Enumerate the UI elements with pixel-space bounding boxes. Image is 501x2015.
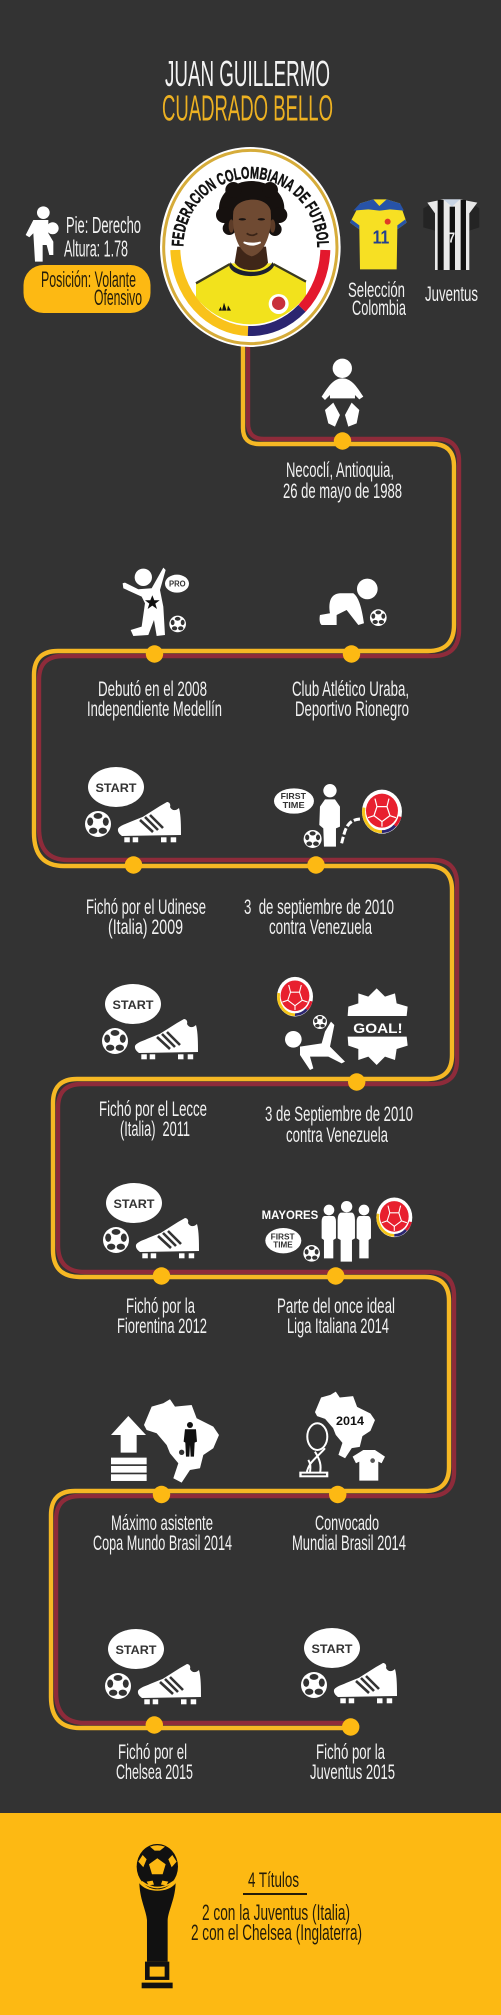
icon: top assist Brazil	[111, 1399, 219, 1483]
icon: crawling baby with ball	[320, 579, 387, 626]
player stats	[64, 212, 141, 262]
caption: first goal: contra Venezuela	[286, 1124, 388, 1147]
timeline dots	[125, 432, 365, 1736]
titles text: 4 Títulos	[248, 1869, 299, 1892]
caption: top assist	[93, 1512, 232, 1555]
caption: ideal team: Liga Italiana 2014	[287, 1315, 389, 1338]
caption: birth	[283, 459, 402, 503]
caption: birth: Necoclí, Antioquia,	[286, 459, 394, 482]
icon: start boot Chelsea	[105, 1629, 201, 1704]
caption: debut: Independiente Medellín	[87, 698, 222, 721]
position pill	[24, 265, 150, 313]
caption: first goal: 3 de Septiembre de 2010	[265, 1103, 413, 1126]
caption: first match	[244, 896, 394, 939]
caption: top assist: Máximo asistente	[111, 1512, 213, 1535]
icon: first time call-up: FIRST	[281, 791, 307, 801]
player stats: Pie: Derecho	[66, 212, 141, 238]
icon: start boot Lecce	[102, 984, 198, 1059]
icon: Juventus jersey	[423, 199, 479, 270]
caption: ideal team	[277, 1295, 395, 1338]
icon: pro player	[123, 568, 189, 636]
title	[162, 53, 333, 128]
player stats: Altura: 1.78	[64, 236, 128, 262]
caption: birth: 26 de mayo de 1988	[283, 480, 402, 503]
icon: start boot Udinese: START	[96, 781, 137, 795]
title: JUAN GUILLERMO	[165, 53, 330, 94]
icon: goal with crest	[277, 977, 408, 1070]
caption: first match: contra Venezuela	[269, 916, 372, 939]
icon: ideal team: FIRST	[271, 1232, 295, 1241]
caption: youth clubs	[292, 678, 409, 721]
caption: top assist: Copa Mundo Brasil 2014	[93, 1532, 232, 1555]
caption: Juventus: Juventus 2015	[310, 1761, 395, 1784]
caption: Chelsea	[116, 1741, 193, 1784]
caption: Lecce: Fichó por el Lecce	[99, 1098, 207, 1121]
caption: Udinese: Fichó por el Udinese	[86, 896, 206, 919]
caption: youth clubs: Deportivo Rionegro	[295, 698, 409, 721]
icon: goal with crest: GOAL!	[353, 1020, 403, 1036]
jersey captions: Colombia	[352, 297, 406, 320]
caption: Fiorentina: Fichó por la	[126, 1295, 195, 1318]
caption: ideal team: Parte del once ideal	[277, 1295, 395, 1318]
icon: Colombia jersey: 11	[373, 226, 389, 247]
caption: World Cup call-up: Mundial Brasil 2014	[292, 1532, 406, 1555]
caption: Fiorentina	[117, 1295, 207, 1338]
icon: start boot Chelsea: START	[116, 1643, 157, 1657]
icon: ideal team: MAYORES	[262, 1208, 318, 1222]
caption: Chelsea: Fichó por el	[118, 1741, 187, 1764]
icon: start boot Juventus	[301, 1628, 397, 1703]
caption: debut	[87, 678, 222, 721]
icon: start boot Fiorentina	[103, 1183, 199, 1258]
titles text: 2 con la Juventus (Italia)	[202, 1900, 350, 1925]
titles text	[191, 1869, 362, 1945]
caption: first goal	[265, 1103, 413, 1147]
caption: Lecce: (Italia) 2011	[120, 1118, 190, 1141]
position pill: Posición: Volante	[41, 267, 136, 292]
icon: start boot Fiorentina: START	[114, 1197, 155, 1211]
icon: ideal team	[262, 1198, 412, 1262]
federation arc text: FEDERACION COLOMBIANA DE FUTBOL	[172, 166, 329, 248]
icon: player kicking ball	[26, 206, 59, 262]
portrait: head	[216, 181, 287, 270]
caption: Udinese	[86, 896, 206, 939]
icon: start boot Juventus: START	[312, 1642, 353, 1656]
tricolour arcs	[175, 250, 325, 331]
panel: titles	[0, 1813, 501, 2015]
icon: start boot Udinese	[85, 767, 181, 842]
portrait badge	[160, 147, 341, 347]
icon: ideal team: TIME	[273, 1240, 293, 1249]
caption: debut: Debutó en el 2008	[98, 678, 207, 701]
caption: youth clubs: Club Atlético Uraba,	[292, 678, 409, 701]
icon: World Cup 2014	[299, 1392, 385, 1481]
icon: start boot Lecce: START	[112, 998, 154, 1012]
caption: Fiorentina: Fiorentina 2012	[117, 1315, 207, 1338]
caption: Lecce	[99, 1098, 207, 1141]
titles text: 2 con el Chelsea (Inglaterra)	[191, 1920, 362, 1945]
caption: World Cup call-up	[292, 1512, 406, 1555]
icon: Juventus jersey: 7	[448, 231, 455, 247]
caption: World Cup call-up: Convocado	[315, 1512, 379, 1535]
jersey captions	[348, 279, 478, 320]
icon: baby	[322, 359, 363, 427]
portrait: shirt	[196, 262, 306, 324]
icon: pro player: PRO	[169, 580, 186, 589]
icon: Colombia jersey	[350, 199, 407, 269]
caption: Juventus	[310, 1741, 395, 1784]
icon: World Cup 2014: 2014	[336, 1414, 364, 1428]
caption: Udinese: (Italia) 2009	[108, 916, 183, 939]
icon: first time call-up	[274, 784, 402, 848]
icon: trophy	[137, 1844, 178, 1988]
timeline path	[34, 340, 459, 1728]
caption: Juventus: Fichó por la	[316, 1741, 385, 1764]
jersey captions: Selección	[348, 279, 405, 302]
caption: Chelsea: Chelsea 2015	[116, 1761, 193, 1784]
caption: first match: 3 de septiembre de 2010	[244, 896, 394, 919]
title: CUADRADO BELLO	[162, 88, 333, 128]
icon: first time call-up: TIME	[283, 800, 305, 810]
position pill: Ofensivo	[94, 285, 142, 310]
